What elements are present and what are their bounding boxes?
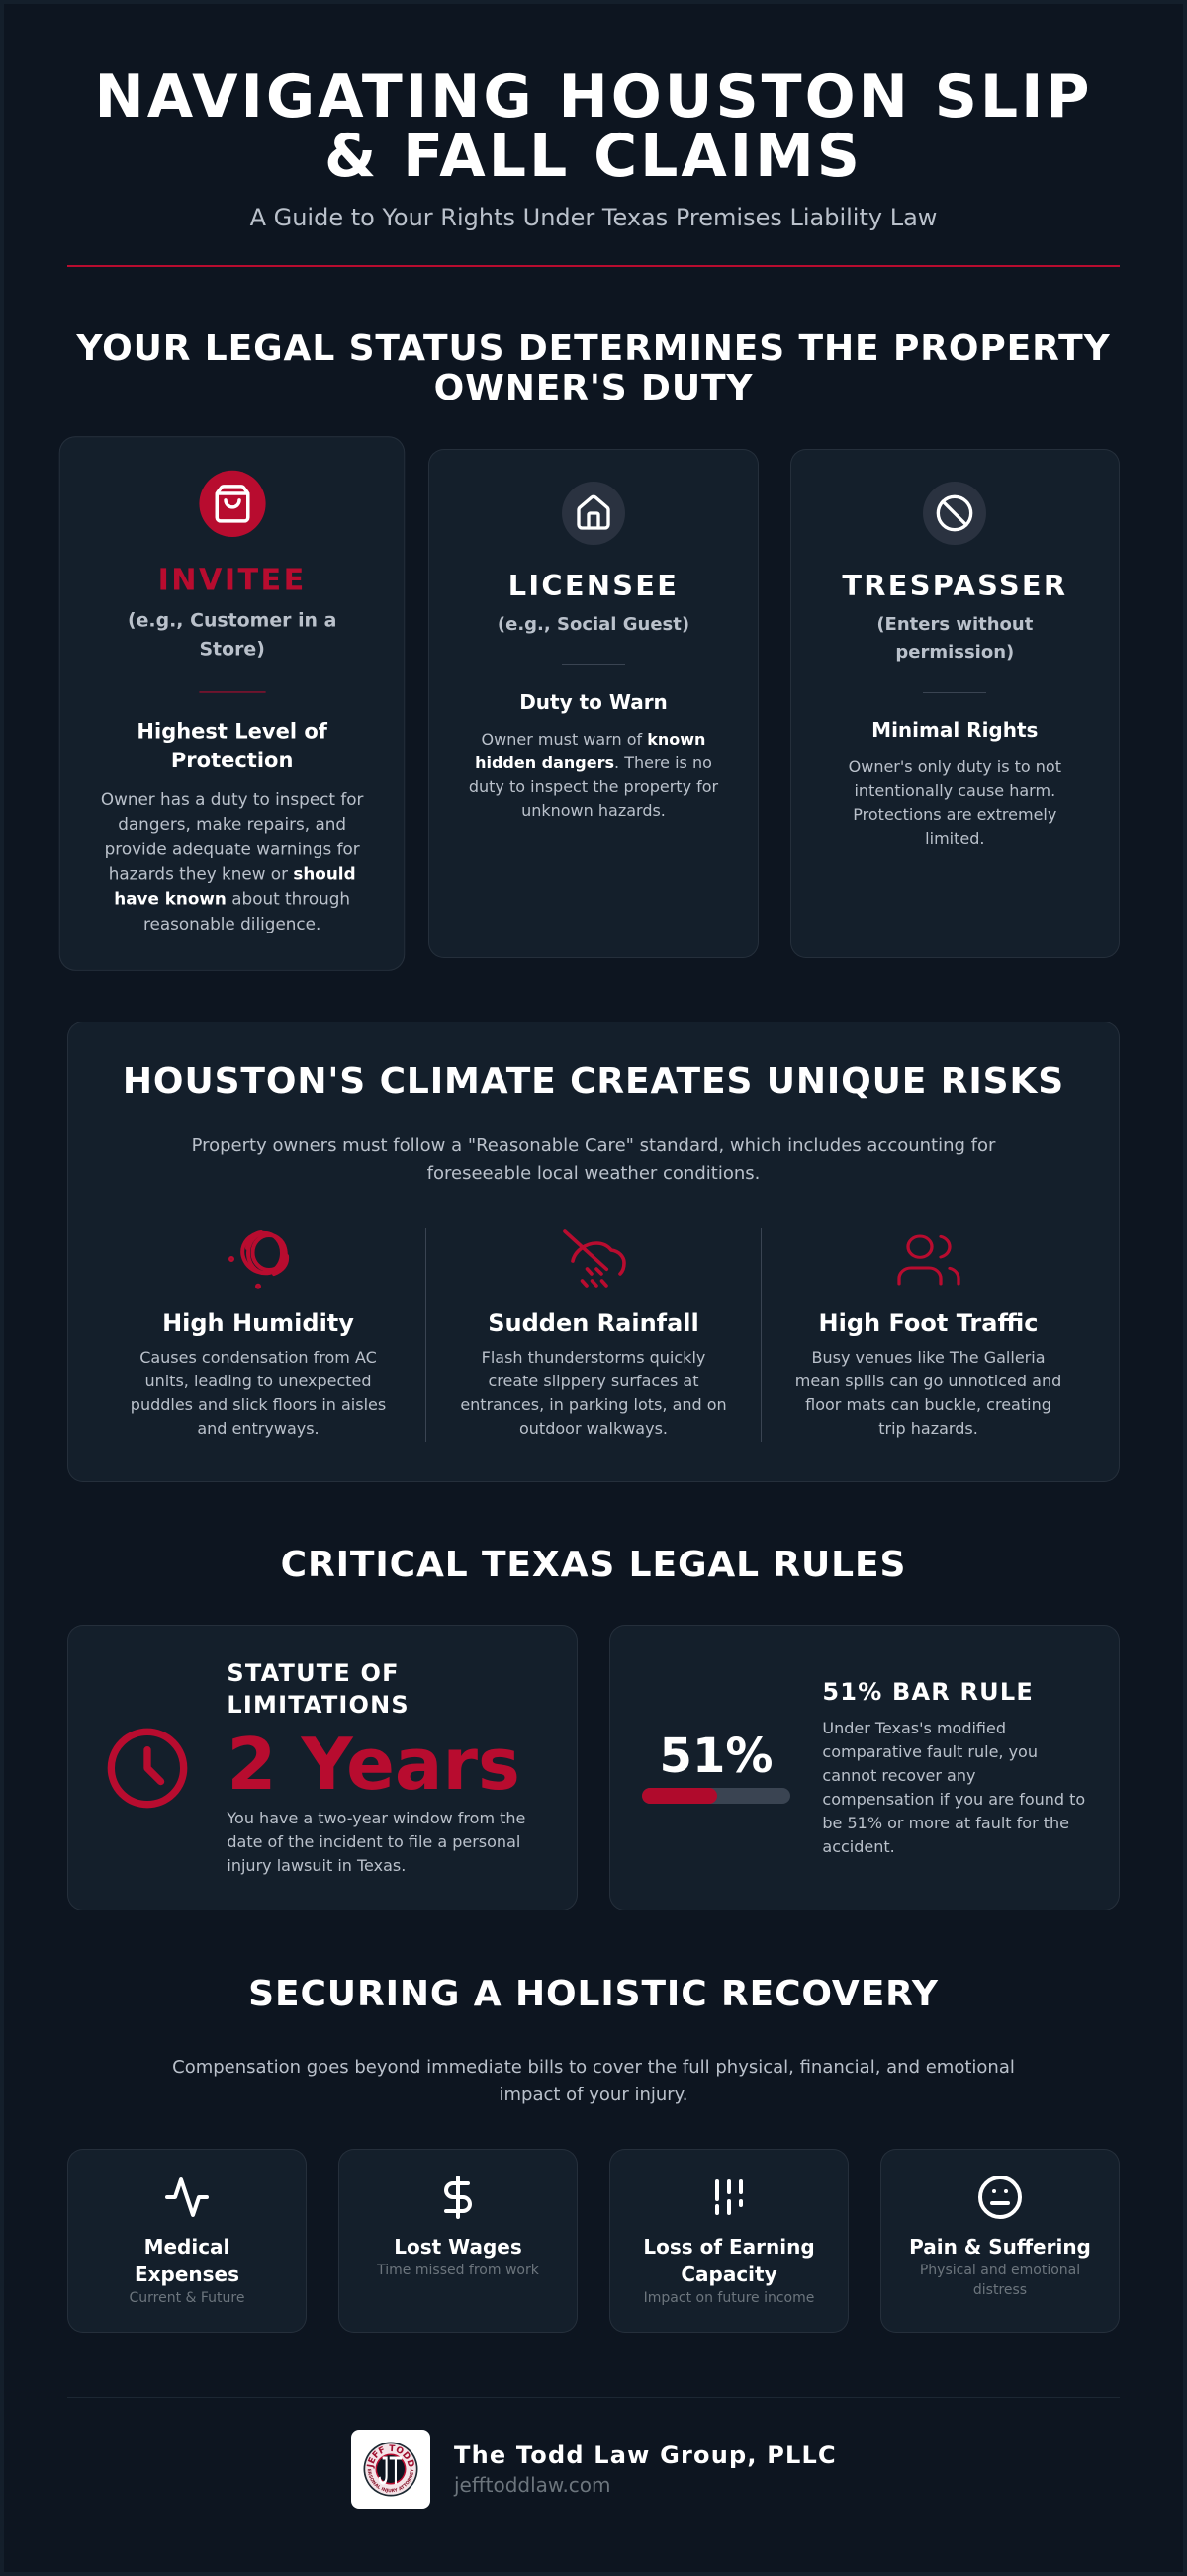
earning heading [643, 2235, 815, 2286]
invitee example: (e.g., Customer in a [128, 610, 336, 632]
wages heading: Lost Wages [394, 2235, 522, 2259]
rainfall text: create slippery surfaces at [488, 1372, 699, 1390]
invitee duty heading: Highest Level of [137, 719, 327, 744]
licensee description: unknown hazards. [521, 801, 666, 820]
statute figure: 2 Years [227, 1723, 520, 1806]
title [95, 62, 1092, 191]
licensee description: hidden dangers. There is no [475, 754, 712, 772]
panel: licensee card [428, 449, 759, 957]
climate intro [192, 1135, 995, 1184]
invitee description [101, 789, 364, 933]
invitee description: Owner has a duty to inspect for [101, 789, 363, 809]
foot traffic text [795, 1348, 1061, 1438]
icon: split bars [715, 2179, 743, 2215]
invitee example [128, 610, 336, 661]
humidity text: Causes condensation from AC [139, 1348, 377, 1367]
risk: sudden rainfall [460, 1309, 727, 1438]
heading: legal status: YOUR LEGAL STATUS DETERMINES THE PROPERTY [76, 328, 1111, 369]
pain note: Physical and emotional [920, 2263, 1080, 2278]
firm name: The Todd Law Group, PLLC [454, 2442, 837, 2469]
medical heading: Expenses [135, 2263, 239, 2286]
licensee example: (e.g., Social Guest) [498, 614, 689, 635]
rainfall text: entrances, in parking lots, and on [460, 1395, 727, 1414]
bar rule text [822, 1719, 1085, 1856]
heading: legal rules: CRITICAL TEXAS LEGAL RULES [281, 1545, 906, 1585]
medical note: Current & Future [129, 2290, 244, 2306]
pain heading: Pain & Suffering [909, 2235, 1091, 2259]
trespasser example [876, 614, 1033, 663]
medical heading [135, 2235, 239, 2286]
icon: house [562, 482, 625, 545]
statute text: You have a two-year window from the [227, 1809, 525, 1827]
medical heading: Medical [144, 2235, 229, 2259]
panel: 51% bar rule [609, 1625, 1120, 1910]
panel: lost wages [338, 2149, 578, 2333]
progress bar [642, 1788, 790, 1804]
header divider [67, 265, 1120, 267]
statute text: date of the incident to file a personal [227, 1832, 520, 1851]
statute heading: STATUTE OF [227, 1659, 400, 1687]
title: NAVIGATING HOUSTON SLIP [95, 62, 1092, 132]
icon: shopping bag [199, 471, 265, 537]
foot traffic text: floor mats can buckle, creating [805, 1395, 1051, 1414]
trespasser example: (Enters without [876, 614, 1033, 635]
website: jefftoddlaw.com [454, 2473, 611, 2497]
footer [351, 2430, 837, 2509]
foot traffic heading: High Foot Traffic [819, 1309, 1038, 1337]
rainfall text: Flash thunderstorms quickly [482, 1348, 705, 1367]
icon: dollar [444, 2176, 472, 2219]
bar rule text: cannot recover any [822, 1766, 975, 1785]
invitee description: reasonable diligence. [143, 914, 320, 933]
humidity heading: High Humidity [162, 1309, 354, 1337]
heading: legal status [76, 328, 1111, 408]
logo [351, 2430, 430, 2509]
invitee duty heading [137, 719, 328, 772]
risk: high foot traffic [795, 1309, 1061, 1438]
trespasser description: limited. [925, 829, 984, 847]
icon: activity [165, 2177, 209, 2217]
recovery intro: impact of your injury. [500, 2085, 687, 2105]
climate intro: Property owners must follow a "Reasonable Care" standard, which includes accounting for [192, 1135, 995, 1156]
panel: statute of limitations [67, 1625, 578, 1910]
trespasser example: permission) [895, 642, 1014, 663]
wages note: Time missed from work [377, 2263, 539, 2278]
foot traffic text: mean spills can go unnoticed and [795, 1372, 1061, 1390]
rainfall heading: Sudden Rainfall [488, 1309, 699, 1337]
panel: pain and suffering [880, 2149, 1120, 2333]
icon: neutral face [978, 2176, 1022, 2219]
rainfall text [460, 1348, 727, 1438]
logo: JT [378, 2448, 403, 2493]
statute text [227, 1809, 525, 1875]
rainfall text: outdoor walkways. [519, 1419, 668, 1438]
bar rule text: comparative fault rule, you [822, 1742, 1038, 1761]
panel: invitee card [59, 436, 406, 970]
licensee description [469, 730, 718, 820]
bar rule text: compensation if you are found to [822, 1790, 1085, 1809]
humidity text [131, 1348, 386, 1438]
logo: PERSONAL INJURY ATTORNEYS [368, 2468, 413, 2493]
recovery intro: Compensation goes beyond immediate bills to cover the full physical, financial, and emotional [172, 2057, 1015, 2078]
heading: recovery: SECURING A HOLISTIC RECOVERY [248, 1974, 939, 2014]
bar rule text: accident. [822, 1837, 895, 1856]
title: & FALL CLAIMS [324, 122, 863, 191]
logo: JEFF TODD [366, 2444, 414, 2469]
earning note: Impact on future income [644, 2290, 814, 2306]
statute heading: LIMITATIONS [227, 1691, 410, 1719]
earning heading: Capacity [681, 2263, 777, 2286]
foot traffic text: Busy venues like The Galleria [811, 1348, 1045, 1367]
panel: climate risks [67, 1022, 1120, 1482]
icon: sudden rain [563, 1229, 626, 1288]
risk: high humidity [131, 1309, 386, 1438]
icon: ban [923, 482, 986, 545]
trespasser description [849, 757, 1061, 847]
earning heading: Loss of Earning [643, 2235, 815, 2259]
icon: users [897, 1234, 960, 1286]
trespasser description: Owner's only duty is to not [849, 757, 1061, 776]
invitee description: hazards they knew or should [109, 864, 356, 884]
icon: humidity [228, 1230, 289, 1289]
licensee title: LICENSEE [508, 569, 679, 602]
statute heading [227, 1659, 410, 1719]
panel: loss of earning capacity [609, 2149, 849, 2333]
pain note: distress [973, 2282, 1027, 2298]
trespasser duty heading: Minimal Rights [871, 718, 1038, 742]
panel: trespasser card [790, 449, 1120, 957]
51% figure: 51% [660, 1729, 773, 1784]
humidity text: and entryways. [197, 1419, 320, 1438]
trespasser description: intentionally cause harm. [854, 781, 1055, 800]
progress fill [642, 1788, 717, 1804]
humidity text: units, leading to unexpected [144, 1372, 372, 1390]
subtitle: A Guide to Your Rights Under Texas Premises Liability Law [250, 204, 937, 231]
bar rule heading: 51% BAR RULE [822, 1678, 1034, 1706]
invitee description: provide adequate warnings for [105, 840, 360, 858]
licensee duty heading: Duty to Warn [519, 690, 668, 714]
invitee title: INVITEE [158, 562, 307, 596]
bar rule text: be 51% or more at fault for the [822, 1814, 1069, 1832]
heading: legal status: OWNER'S DUTY [434, 368, 753, 408]
licensee description: duty to inspect the property for [469, 777, 718, 796]
trespasser description: Protections are extremely [853, 805, 1056, 824]
invitee duty heading: Protection [171, 748, 293, 772]
bar rule text: Under Texas's modified [822, 1719, 1006, 1737]
trespasser title: TRESPASSER [842, 569, 1067, 602]
panel: medical expenses [67, 2149, 307, 2333]
licensee description: Owner must warn of known [482, 730, 705, 749]
invitee description: dangers, make repairs, and [118, 814, 346, 834]
statute text: injury lawsuit in Texas. [227, 1856, 406, 1875]
icon: clock [107, 1729, 188, 1808]
humidity text: puddles and slick floors in aisles [131, 1395, 386, 1414]
climate intro: foreseeable local weather conditions. [427, 1163, 760, 1184]
invitee description: have known about through [114, 889, 350, 909]
pain note [920, 2263, 1080, 2298]
invitee example: Store) [199, 639, 265, 661]
recovery intro [172, 2057, 1015, 2105]
foot traffic text: trip hazards. [878, 1419, 978, 1438]
heading: climate: HOUSTON'S CLIMATE CREATES UNIQUE RISKS [123, 1061, 1064, 1102]
